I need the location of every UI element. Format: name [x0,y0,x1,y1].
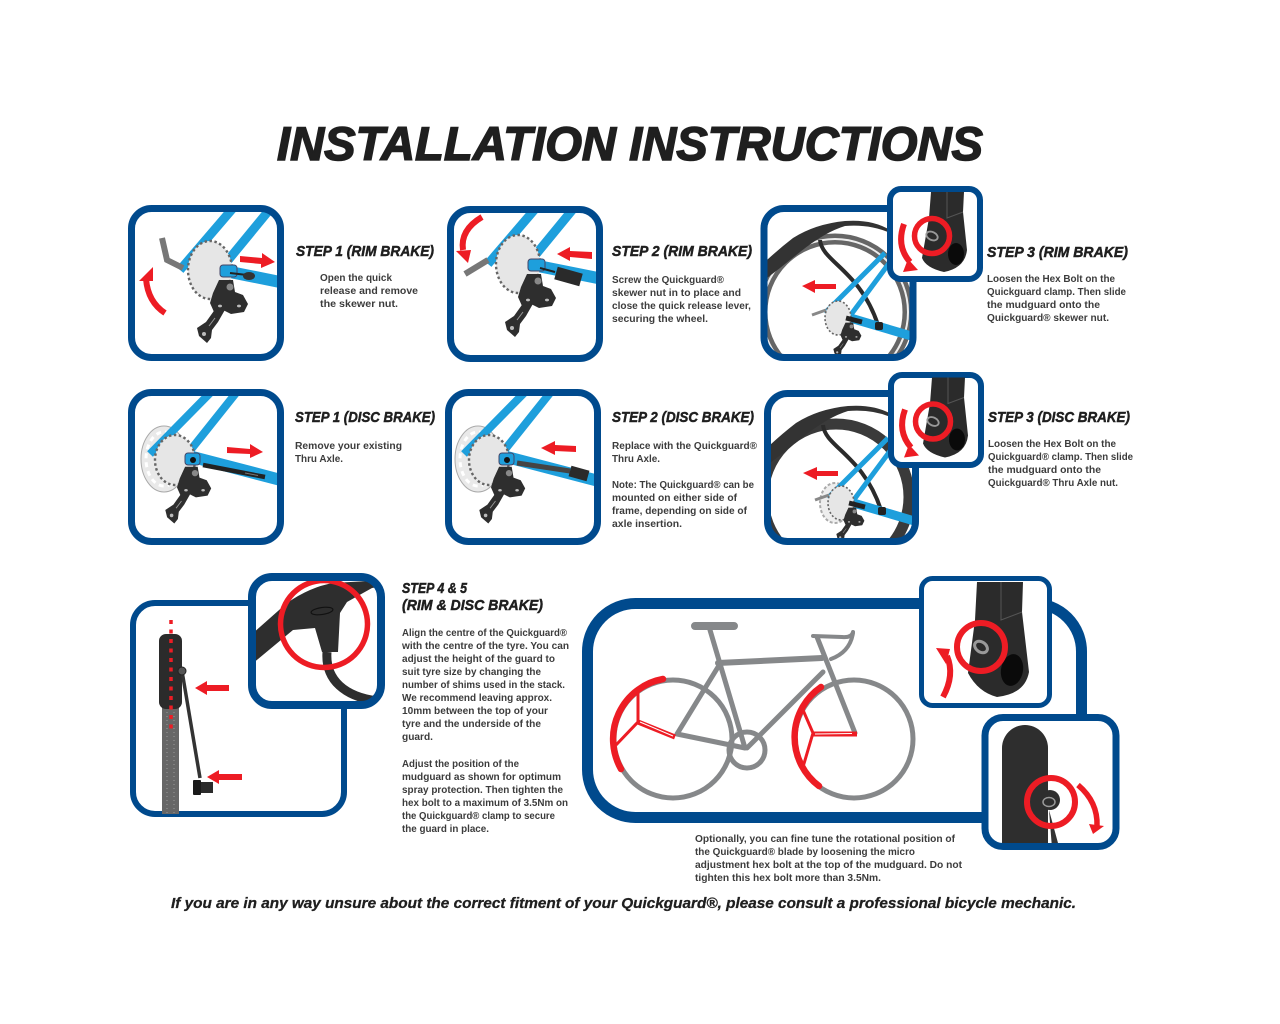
text: optional fine tuning [695,834,963,884]
heading: step 4 and 5: STEP 4 & 5 [402,580,468,597]
heading: step 3 rim: STEP 3 (RIM BRAKE) [987,244,1128,261]
text: step 4 and 5: Align the centre of the Quickguard® [402,628,568,639]
arrow: lever down [456,217,482,263]
heading: step 4 and 5: (RIM & DISC BRAKE) [402,597,543,614]
illustration: rear dropout with open quick release [159,212,277,343]
text: step 1 disc [295,441,402,465]
text: step 1 rim [320,273,418,310]
text: step 4 and 5: the Quickguard® clamp to secure [402,811,555,822]
panel border [132,392,280,542]
text: step 4 and 5: tyre and the underside of the [402,719,541,730]
illustration: mudguard aligned over tyre [159,620,213,820]
arrow: slide left [803,467,838,480]
text: step 2 disc: Thru Axle. [612,454,660,465]
text: optional fine tuning: the Quickguard® blade by loosening the micro [695,847,915,858]
bike illustration [614,623,913,798]
panel: step 2 rim brake illustration [450,194,608,358]
arrow: push left [557,247,592,261]
text: step 4 and 5: suit tyre size by changing the [402,667,541,678]
text: step 2 rim: Screw the Quickguard® [612,275,725,286]
text: optional fine tuning: Optionally, you can fine tune the rotational position of [695,834,956,845]
text: step 1 rim: release and remove [320,286,418,297]
text: step 1 rim: the skewer nut. [320,299,398,310]
text: step 4 and 5: spray protection. Then tighten the [402,785,563,796]
text: step 4 and 5: 10mm between the top of your [402,706,548,717]
heading: step 2 rim: STEP 2 (RIM BRAKE) [612,243,752,260]
inset: mudguard clamp [252,577,385,705]
text: step 4 and 5: We recommend leaving approx. [402,693,552,704]
panel border [768,394,916,542]
text: step 2 disc: mounted on either side of [612,493,738,504]
panel border [764,208,913,358]
text: step 2 disc [612,441,758,530]
text: step 3 rim [987,274,1126,324]
text: optional fine tuning: tighten this hex bolt more than 3.5Nm. [695,873,881,884]
panel border [132,208,280,358]
arrow: lower [207,770,242,784]
inset: blade rotation top view [922,578,1050,706]
text: step 1 disc: Remove your existing [295,441,402,452]
arrow: push left [541,441,576,455]
text: step 2 rim: securing the wheel. [612,314,708,325]
inset: hex bolt on clamp [890,189,980,279]
red mudguard: front [795,687,857,786]
text: step 1 disc: Thru Axle. [295,454,343,465]
text: step 2 rim [612,275,751,325]
arrow: pull right [240,253,275,268]
text: step 2 disc: Note: The Quickguard® can be [612,480,754,491]
arrow: upper [195,681,229,695]
illustration: wheel and mudguard on disc bike [771,406,912,538]
red mudguard: rear [613,679,675,769]
illustration: wheel and mudguard [768,220,910,354]
text: step 3 disc: Loosen the Hex Bolt on the [988,439,1116,450]
arrow: slide left [802,280,836,293]
text: step 2 rim: skewer nut in to place and [612,288,741,299]
text: step 3 rim: Quickguard® skewer nut. [987,313,1109,324]
text: step 2 disc: frame, depending on side of [612,506,748,517]
text: step 1 rim: Open the quick [320,273,392,284]
illustration: Quickguard thru axle inserted [454,396,594,524]
text: step 4 and 5: with the centre of the tyre. You can [401,641,569,652]
heading: step 4 and 5 [402,580,543,614]
heading: step 3 disc: STEP 3 (DISC BRAKE) [988,409,1130,426]
arrow: lever up [139,267,165,313]
inset: blade rotation bottom view [985,718,1116,848]
illustration: disc dropout with axle removed [140,396,277,524]
panel: step 2 disc brake illustration [448,388,614,542]
title: INSTALLATION INSTRUCTIONS [277,117,983,170]
panel: step 3 rim brake illustration [762,189,980,385]
text: step 4 and 5: adjust the height of the guard to [402,654,555,665]
panel: bike overview [588,578,1116,848]
text: step 3 rim: Loosen the Hex Bolt on the [987,274,1115,285]
panel: step 1 rim brake illustration [132,200,300,358]
heading: step 2 disc: STEP 2 (DISC BRAKE) [612,409,754,426]
illustration: skewer nut being fitted [464,213,596,337]
text: step 4 and 5 [401,628,569,835]
text: step 2 disc: Replace with the Quickguard® [612,441,758,452]
text: step 4 and 5: Adjust the position of the [402,759,519,770]
text: step 2 disc: axle insertion. [612,519,682,530]
text: step 2 rim: close the quick release lever, [612,301,751,312]
heading: step 1 rim: STEP 1 (RIM BRAKE) [296,243,434,260]
text: step 4 and 5: the guard in place. [402,824,489,835]
text: step 3 rim: Quickguard clamp. Then slide [987,287,1126,298]
panel: step 4 and 5 illustration [133,577,385,820]
arrow: pull right [227,444,263,458]
text: step 3 disc: Quickguard® Thru Axle nut. [988,478,1118,489]
panel border [448,392,598,542]
heading: step 1 disc: STEP 1 (DISC BRAKE) [295,409,435,426]
text: step 4 and 5: number of shims used in the stack. [402,680,565,691]
footer warning: If you are in any way unsure about the correct fitment of your Quickguard®, please consult a professional bicycle mechanic. [171,895,1076,912]
text: step 3 disc [988,439,1133,489]
text: step 3 rim: the mudguard onto the [987,300,1100,311]
text: step 4 and 5: mudguard as shown for optimum [402,772,561,783]
inset: hex bolt on clamp [891,375,981,465]
panel: step 1 disc brake illustration [132,388,300,542]
text: optional fine tuning: adjustment hex bolt at the top of the mudguard. Do not [695,860,963,871]
panel: step 3 disc brake illustration [764,372,984,545]
text: step 3 disc: Quickguard® clamp. Then slide [988,452,1133,463]
panel border [450,210,600,358]
text: step 4 and 5: guard. [402,732,433,743]
text: step 4 and 5: hex bolt to a maximum of 3.5Nm on [402,798,568,809]
text: step 3 disc: the mudguard onto the [988,465,1101,476]
